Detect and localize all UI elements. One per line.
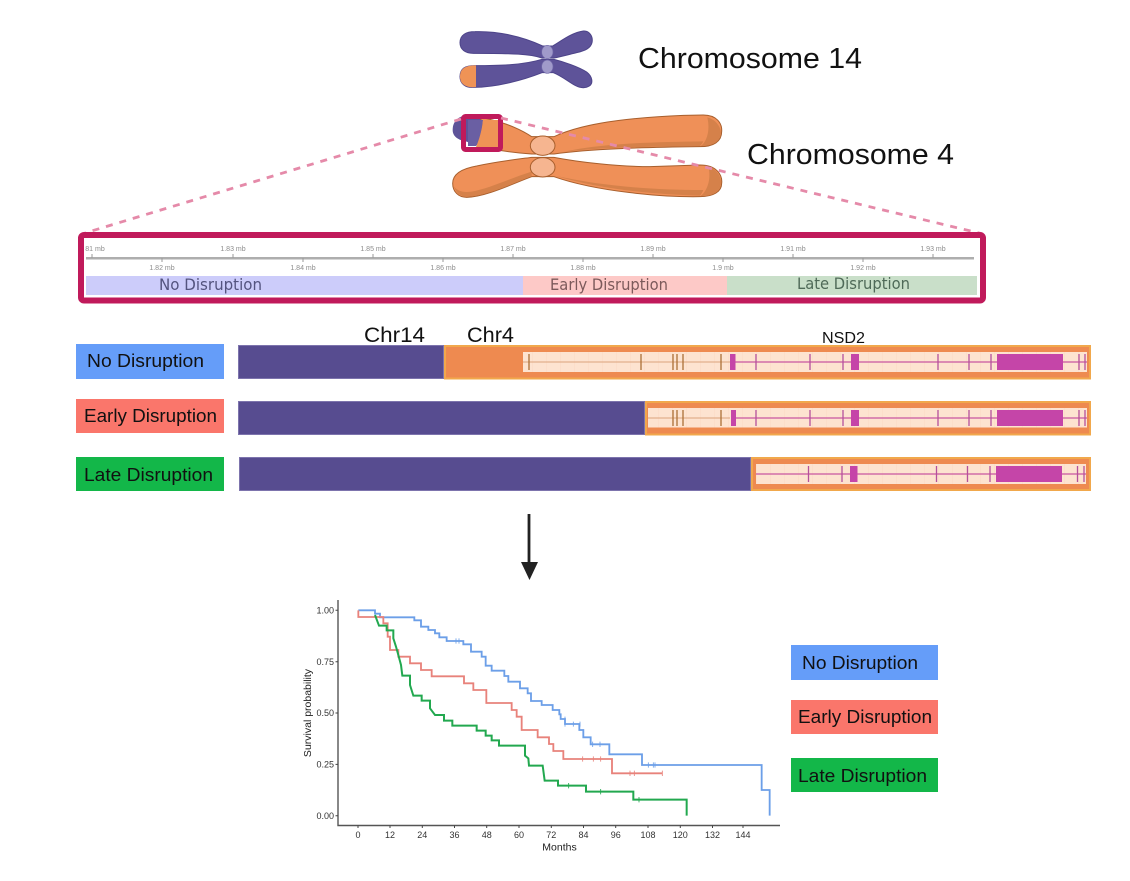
- x axis ticks and labels: 0: [355, 830, 361, 840]
- genomic axis: 1.88 mb: [570, 265, 596, 272]
- x axis ticks and labels: 144: [735, 830, 751, 840]
- y axis ticks and labels: 0.75: [316, 657, 334, 667]
- legend: no disruption: No Disruption: [802, 652, 918, 673]
- label: Late Disruption: [84, 465, 213, 485]
- x axis ticks and labels: 72: [546, 830, 556, 840]
- x axis ticks and labels: 120: [673, 830, 688, 840]
- label: [76, 399, 224, 433]
- genomic axis: 1.82 mb: [149, 265, 175, 272]
- chr14 segment: [240, 458, 750, 490]
- x axis ticks and labels: 36: [449, 830, 460, 840]
- x axis ticks and labels: 132: [705, 830, 720, 840]
- legend: [791, 645, 938, 792]
- band: early disruption: [523, 275, 727, 295]
- genomic axis: 1.89 mb: [640, 246, 666, 253]
- genomic axis: 1.9 mb: [712, 265, 734, 272]
- curve: no disruption: [358, 610, 770, 816]
- x axis ticks and labels: 60: [514, 830, 524, 840]
- axes: [338, 600, 780, 826]
- chromosome 4 label: Chromosome 4: [747, 139, 954, 171]
- genomic axis: 1.85 mb: [360, 246, 386, 253]
- label: [76, 344, 224, 379]
- row: late disruption: [76, 457, 1090, 491]
- x axis ticks and labels: 96: [611, 830, 621, 840]
- chromosome 14 label: Chromosome 14: [638, 43, 862, 75]
- band: no disruption: No Disruption: [159, 275, 262, 294]
- y axis ticks and labels: [316, 606, 338, 821]
- chr4 segment with NSD2: [646, 402, 1090, 434]
- x axis ticks and labels: [355, 826, 751, 840]
- y axis ticks and labels: 1.00: [316, 606, 334, 616]
- heading: Chr4: Chr4: [467, 324, 514, 347]
- icon: chromosome 4: [453, 115, 722, 197]
- genomic axis: 1.92 mb: [850, 265, 876, 272]
- heading: NSD2: NSD2: [822, 330, 865, 347]
- arrow: [521, 514, 538, 580]
- label: [76, 457, 224, 491]
- legend: early disruption: Early Disruption: [798, 706, 932, 727]
- genomic axis: 1.87 mb: [500, 246, 526, 253]
- genomic axis: 1.91 mb: [780, 246, 806, 253]
- survival chart: [302, 600, 780, 854]
- legend: no disruption: [791, 645, 938, 680]
- x axis ticks and labels: 48: [482, 830, 492, 840]
- genomic axis: 1.93 mb: [920, 246, 946, 253]
- legend: late disruption: [791, 758, 938, 792]
- icon: chromosome 14: [460, 31, 592, 88]
- curve: early disruption: [358, 610, 662, 776]
- curve: late disruption: [375, 615, 687, 816]
- heading: Chr14: Chr14: [364, 324, 425, 347]
- x axis ticks and labels: 108: [640, 830, 656, 840]
- zoom selection box on chromosome 4: [464, 116, 500, 150]
- band: late disruption: [727, 274, 977, 295]
- dashed zoom lines: [85, 118, 983, 234]
- chr14 segment: [238, 346, 444, 378]
- chr4 segment with NSD2: [752, 458, 1090, 490]
- row: early disruption: [76, 399, 1090, 434]
- row: no disruption: [76, 344, 1090, 379]
- band: early disruption: Early Disruption: [550, 275, 668, 294]
- chr4 segment with NSD2: [445, 346, 1090, 378]
- y axis title: Survival probability: [302, 668, 314, 757]
- legend: late disruption: Late Disruption: [798, 765, 927, 786]
- band: no disruption: [86, 275, 523, 295]
- label: No Disruption: [87, 351, 204, 371]
- y axis ticks and labels: 0.25: [316, 760, 334, 770]
- label: Early Disruption: [84, 406, 217, 426]
- genomic axis: 1.84 mb: [290, 265, 316, 272]
- genomic axis: [85, 246, 974, 272]
- genomic axis: 1.86 mb: [430, 265, 456, 272]
- x axis title: Months: [542, 842, 577, 854]
- y axis ticks and labels: 0.00: [316, 811, 334, 821]
- chr14 segment: [238, 402, 644, 434]
- y axis ticks and labels: 0.50: [316, 708, 334, 718]
- x axis ticks and labels: 24: [417, 830, 427, 840]
- x axis ticks and labels: 12: [385, 830, 395, 840]
- band: late disruption: Late Disruption: [797, 274, 910, 293]
- legend: early disruption: [791, 700, 938, 734]
- genomic axis: 1.83 mb: [220, 246, 246, 253]
- x axis ticks and labels: 84: [578, 830, 589, 840]
- panel: genomic region: [81, 235, 983, 300]
- genomic axis: 81 mb: [85, 246, 105, 253]
